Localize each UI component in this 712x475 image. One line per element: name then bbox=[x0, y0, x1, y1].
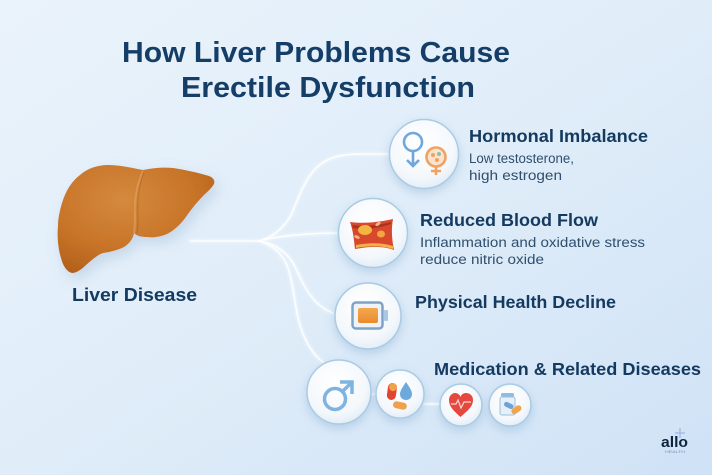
text: physical health decline: Physical Health Decline bbox=[415, 292, 616, 312]
text: hormonal imbalance: Hormonal Imbalance bbox=[469, 126, 648, 146]
text: medication and related diseases: Medication & Related Diseases bbox=[434, 359, 701, 379]
title: How Liver Problems Cause bbox=[122, 37, 510, 69]
icon: hormonal imbalance bbox=[390, 120, 458, 188]
logo: allo health: HEALTH bbox=[665, 449, 685, 454]
title: Erectile Dysfunction bbox=[181, 72, 475, 104]
text: reduced blood flow: Inflammation and oxidative stress bbox=[420, 235, 645, 250]
icon: pills and drop bbox=[376, 370, 424, 418]
label: liver disease: Liver Disease bbox=[72, 285, 197, 305]
icon: battery bbox=[335, 283, 401, 349]
logo: allo health: allo bbox=[661, 434, 688, 451]
text: hormonal imbalance: high estrogen bbox=[469, 168, 562, 183]
text: hormonal imbalance: Low testosterone, bbox=[469, 151, 574, 166]
text: hormonal imbalance bbox=[469, 126, 648, 183]
text: reduced blood flow: Reduced Blood Flow bbox=[420, 210, 598, 230]
icon: reduced blood flow bbox=[338, 198, 408, 268]
logo: allo health bbox=[661, 428, 688, 454]
icon: liver bbox=[58, 165, 214, 273]
icon: heart bbox=[440, 384, 482, 426]
connector lines bbox=[190, 154, 440, 404]
icon: male symbol bbox=[307, 360, 371, 424]
icon: medication bottle bbox=[489, 384, 531, 426]
text: reduced blood flow bbox=[420, 210, 645, 267]
text: reduced blood flow: reduce nitric oxide bbox=[420, 252, 544, 267]
title bbox=[122, 37, 510, 104]
